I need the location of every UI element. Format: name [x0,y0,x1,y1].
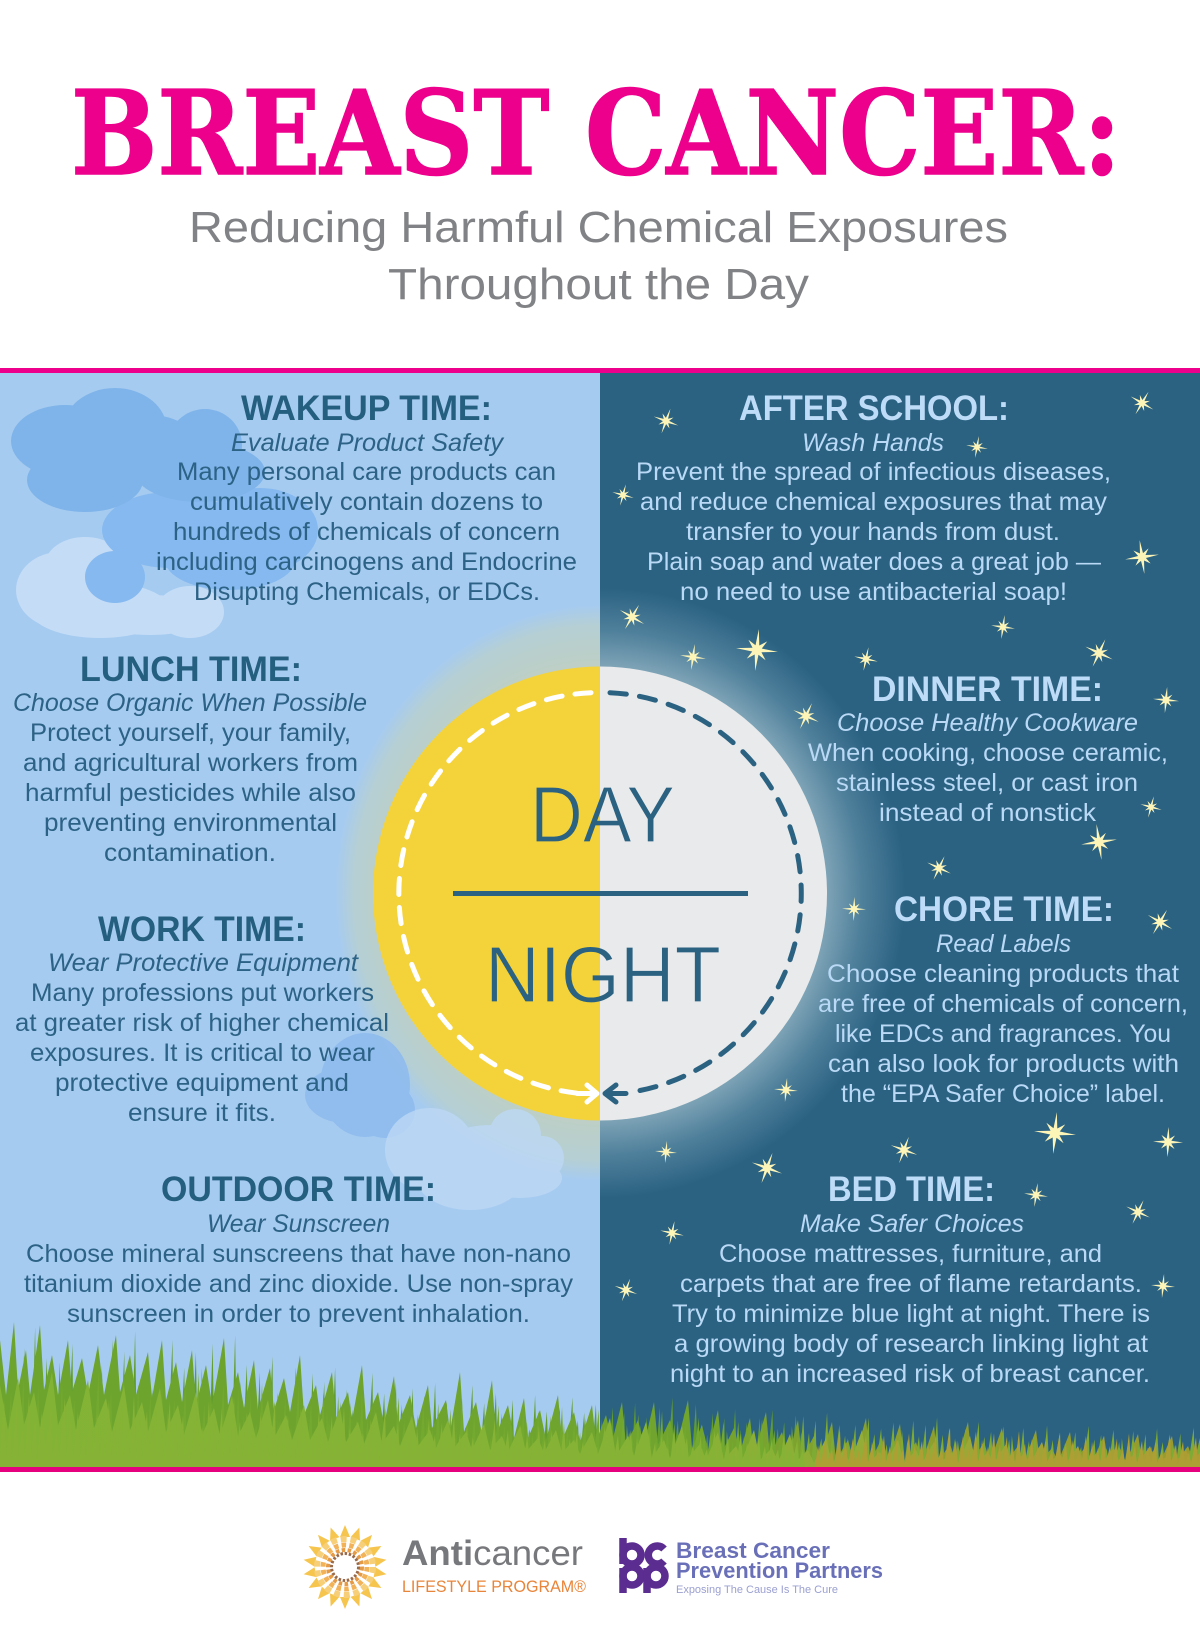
dashed arrow: day [399,693,597,1102]
section: wakeup time: WAKEUP TIME: [241,389,492,428]
section: lunch time: preventing environmental [44,809,337,837]
logo: anticancer lifestyle program [303,1525,586,1609]
section: chore time: CHORE TIME: [894,890,1114,929]
wordmark: Breast Cancer [676,1538,830,1563]
section: chore time [818,890,1188,1108]
dashed arrow: night [605,693,801,1102]
section: dinner time: stainless steel, or cast iron [836,769,1138,797]
subtitle [189,203,1008,309]
sun half [373,666,600,1120]
panel: night background [600,373,1200,1467]
section: chore time: can also look for products with [828,1050,1179,1078]
section: wakeup time: cumulatively contain dozens to [190,488,543,516]
section: wakeup time [156,389,577,606]
section: dinner time: instead of nonstick [879,799,1097,827]
section: bed time [670,1170,1150,1388]
moon glow [600,598,895,1188]
section: outdoor time: sunscreen in order to prevent inhalation. [67,1300,530,1328]
section: bed time: Make Safer Choices [800,1210,1024,1238]
section: work time: WORK TIME: [98,910,306,949]
section: chore time: like EDCs and fragrances. You [835,1020,1171,1048]
icon: bcpp monogram [623,1538,665,1593]
section: dinner time: DINNER TIME: [872,670,1103,709]
section: wakeup time: Many personal care products can [177,458,556,486]
section: wakeup time: including carcinogens and Endocrine [156,548,577,576]
section: chore time: Read Labels [936,930,1071,958]
panel: day background [0,373,600,1467]
section: lunch time: and agricultural workers from [23,749,358,777]
header rule [0,368,1200,373]
sun glow [340,611,600,1175]
section: dinner time [808,670,1168,827]
section: chore time: the “EPA Safer Choice” label. [841,1080,1165,1108]
section: bed time: BED TIME: [828,1170,995,1209]
section: work time: protective equipment and [55,1069,349,1097]
section: dinner time: Choose Healthy Cookware [837,709,1138,737]
section: outdoor time [24,1170,574,1328]
icon: sunburst [303,1525,387,1609]
section: after school: AFTER SCHOOL: [739,389,1009,428]
section: chore time: Choose cleaning products that [827,960,1179,988]
section: lunch time: contamination. [104,839,276,867]
section: wakeup time: Disupting Chemicals, or EDCs. [194,578,540,606]
label: day: DAY [530,770,675,859]
moon half [600,666,827,1120]
section: after school: and reduce chemical exposures that may [640,488,1107,516]
section: after school: transfer to your hands from dust. [686,518,1060,546]
section: wakeup time: hundreds of chemicals of concern [173,518,560,546]
section: chore time: are free of chemicals of concern, [818,990,1188,1018]
stars [610,385,1184,1305]
section: bed time: Try to minimize blue light at night. There is [672,1300,1150,1328]
section: outdoor time: OUTDOOR TIME: [161,1170,436,1209]
section: after school: Plain soap and water does a great job — [647,548,1101,576]
section: outdoor time: titanium dioxide and zinc dioxide. Use non-spray [24,1270,574,1298]
section: lunch time: Protect yourself, your family, [30,719,351,747]
section: bed time: Choose mattresses, furniture, and [719,1240,1102,1268]
section: outdoor time: Wear Sunscreen [207,1210,390,1238]
grass [0,1322,1200,1467]
section: bed time: night to an increased risk of breast cancer. [670,1360,1150,1388]
section: lunch time [13,650,367,867]
section: lunch time: harmful pesticides while also [25,779,356,807]
section: lunch time: LUNCH TIME: [80,650,302,689]
subtitle: Reducing Harmful Chemical Exposures [189,203,1008,252]
clouds: lower sky [305,1033,564,1210]
logo: breast cancer prevention partners: Prevention Partners [676,1558,883,1583]
section: after school: Wash Hands [802,429,944,457]
section: after school [636,389,1111,606]
tagline: lifestyle program: LIFESTYLE PROGRAM® [402,1577,586,1596]
section: work time: Many professions put workers [31,979,374,1007]
section: dinner time: When cooking, choose ceramic, [808,739,1168,767]
section: outdoor time: Choose mineral sunscreens that have non-nano [26,1240,571,1268]
tagline: Exposing The Cause Is The Cure [676,1584,838,1596]
logo: breast cancer prevention partners [623,1538,883,1596]
section: bed time: a growing body of research linking light at [674,1330,1148,1358]
clouds: upper sky [11,388,318,638]
section: work time [15,910,389,1127]
section: after school: no need to use antibacterial soap! [680,578,1067,606]
wordmark: anticancer: Anticancer [402,1534,583,1573]
section: work time: ensure it fits. [128,1099,276,1127]
subtitle: Throughout the Day [388,260,809,309]
label: night: NIGHT [485,930,721,1019]
section: bed time: carpets that are free of flame retardants. [680,1270,1142,1298]
section: wakeup time: Evaluate Product Safety [231,429,505,457]
day night circle [373,666,827,1120]
section: lunch time: Choose Organic When Possible [13,689,367,717]
footer rule [0,1467,1200,1472]
section: after school: Prevent the spread of infectious diseases, [636,458,1111,486]
section: work time: at greater risk of higher chemical [15,1009,389,1037]
section: work time: Wear Protective Equipment [48,949,359,977]
section: work time: exposures. It is critical to wear [30,1039,375,1067]
divider [453,891,748,896]
